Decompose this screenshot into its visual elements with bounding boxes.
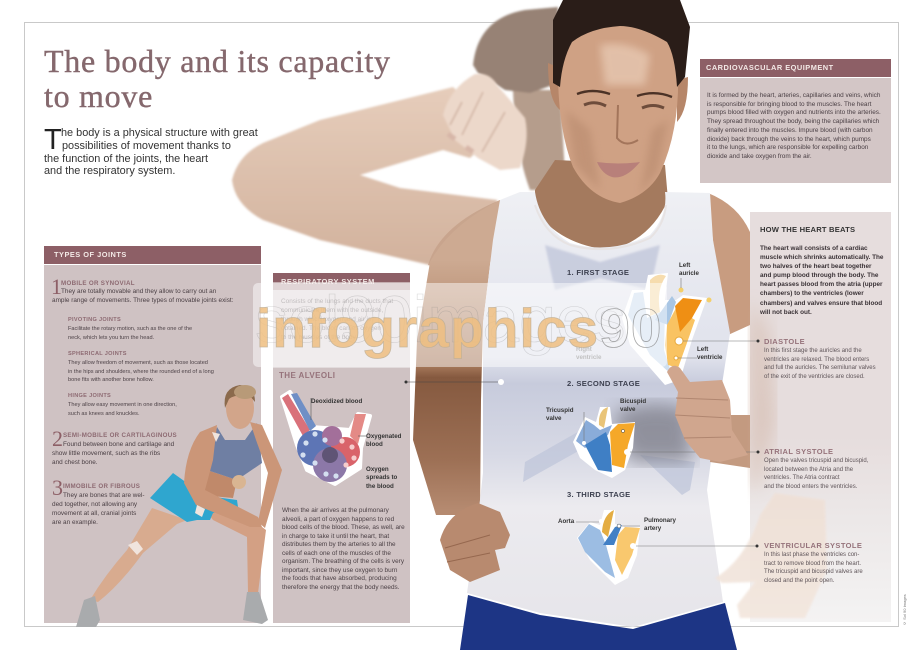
- watermark band: [253, 283, 667, 367]
- vessels: [282, 394, 310, 436]
- alveoli text: alveoli, a part of oxygen happens to red: [282, 516, 394, 522]
- types of joints text: and chest bone.: [52, 459, 98, 466]
- heart: third stage: [576, 510, 757, 585]
- man: face: [558, 18, 678, 203]
- alveoli text: cells of each one of the muscles of the: [282, 550, 391, 556]
- alveoli diagram: [280, 390, 372, 486]
- respiratory system panel: through which oxygen and air is: [281, 316, 371, 323]
- connector arrows: [404, 340, 760, 548]
- woman: midriff: [190, 470, 237, 498]
- heart: first stage: [622, 273, 757, 385]
- types of joints text: They are bones that are wel-: [63, 492, 145, 499]
- respiratory system panel: communicate them with the outside,: [281, 307, 383, 314]
- heart stage labels: Bicuspid: [620, 398, 646, 405]
- types of joints text: in the hips and shoulders, where the rounded end of a long: [68, 369, 214, 375]
- how the heart beats text: will not back out.: [760, 309, 812, 316]
- man: nose and mouth: [617, 105, 638, 144]
- heart stage labels: Aorta: [558, 518, 574, 525]
- diastole: and full the auricles. The semilunar valves: [764, 365, 876, 371]
- types of joints text: HINGE JOINTS: [68, 393, 111, 399]
- types of joints text: [51, 274, 233, 526]
- woman: head: [226, 387, 254, 429]
- man: ears: [548, 63, 688, 122]
- atrial systole: and the blood enters the ventricles.: [764, 484, 857, 490]
- intro text: [44, 124, 258, 177]
- alveoli heading: THE ALVEOLI: [279, 371, 335, 380]
- panel: alveoli background: [273, 368, 410, 623]
- types of joints text: 2: [52, 426, 63, 451]
- how the heart beats text: heart passes blood from the atria (upper: [760, 281, 883, 288]
- respiratory system panel: to the muscles of the body.: [281, 334, 357, 341]
- panel: how the heart beats background: [750, 212, 891, 622]
- heart stage labels: 2. SECOND STAGE: [567, 379, 640, 388]
- ventricular systole: In this last phase the ventricles con-: [764, 552, 859, 558]
- respiratory system panel: obtained. The blood carries oxygen: [281, 325, 381, 332]
- cardiovascular text: They spread throughout the body, being the capillaries which: [707, 118, 879, 125]
- types of joints text: They are totally movable and they allow to carry out an: [61, 288, 216, 295]
- diastole: DIASTOLE: [764, 337, 805, 346]
- types of joints text: movement at all, cranial joints: [52, 510, 136, 517]
- cardiovascular text: [707, 92, 881, 160]
- heart stage labels: valve: [620, 406, 635, 413]
- heart diagrams: [573, 273, 756, 585]
- man: left fist: [440, 503, 510, 582]
- woman: shoes: [76, 592, 268, 627]
- how the heart beats text: two halves of the heart beat together: [760, 263, 872, 270]
- woman: shorts: [150, 473, 238, 522]
- man: upper-left shoulder shadow: [428, 200, 505, 280]
- how the heart beats text: chambers) to the ventricles (lower: [760, 290, 864, 297]
- cardiovascular text: pumps blood filled with oxygen and nutrients into the arteries.: [707, 109, 881, 116]
- types of joints text: bone fits with another bone hollow.: [68, 377, 154, 383]
- woman: back leg: [90, 508, 187, 602]
- how the heart beats text: muscle which shrinks automatically. The: [760, 254, 883, 261]
- how the heart beats heading: HOW THE HEART BEATS: [760, 225, 855, 234]
- types of joints header: [44, 246, 261, 264]
- man: right fist over heart: [667, 366, 748, 462]
- alveoli text: organism. The breathing of the cells is very: [282, 558, 404, 565]
- man: left arm: [413, 200, 500, 515]
- man: tank top: [467, 192, 730, 627]
- alveoli text: [282, 507, 405, 590]
- types of joints text: neck, which lets you turn the head.: [68, 335, 154, 341]
- intro text: T: [44, 124, 62, 156]
- types of joints text: They allow easy movement in one direction,: [68, 402, 177, 408]
- types of joints text: IMMOBILE OR FIBROUS: [63, 483, 140, 490]
- alveoli text: the foods that have absorbed, producing: [282, 575, 397, 582]
- diastole: ventricles are relaxed. The blood enters: [764, 357, 869, 363]
- ventricular systole: VENTRICULAR SYSTOLE: [764, 541, 862, 550]
- photo: stretching woman: [76, 385, 282, 627]
- man: shorts: [460, 595, 737, 650]
- alveoli labels: [311, 398, 401, 490]
- panel skin tint: [750, 300, 775, 490]
- cardiovascular header: CARDIOVASCULAR EQUIPMENT: [706, 63, 834, 72]
- alveoli text: blood cells of the blood. These, as well, are: [282, 524, 405, 531]
- intro text: possibilities of movement thanks to: [62, 140, 231, 152]
- respiratory system panel: [273, 273, 410, 368]
- credit: © Sol 90 Images: [902, 594, 907, 626]
- atrial systole: ventricles. The Atria contract: [764, 475, 840, 481]
- types of joints text: Found between bone and cartilage and: [63, 441, 174, 448]
- how the heart beats text: [760, 245, 884, 316]
- man: collar trim: [535, 205, 666, 249]
- respiratory system panel: Consists of the lungs and the ducts that: [281, 298, 393, 305]
- heart stage labels: Left: [697, 346, 708, 353]
- diastole: of the exit of the ventricles are closed.: [764, 374, 865, 380]
- cardiovascular text: it to the lungs, which are responsible for expelling carbon: [707, 144, 868, 151]
- cardiovascular text: dioxide) back through the veins to the heart, which pumps: [707, 136, 871, 142]
- atrial systole: ATRIAL SYSTOLE: [764, 447, 833, 456]
- types of joints text: ded together, not allowing any: [52, 501, 137, 508]
- cardiovascular text: is responsible for bringing blood to the muscles. The heart: [707, 101, 871, 108]
- how the heart beats text: The heart wall consists of a cardiac: [760, 245, 868, 252]
- man: brows and eyes: [577, 91, 672, 97]
- diastole: In this first stage the auricles and the: [764, 348, 862, 354]
- man: shirt shadow: [612, 404, 692, 462]
- title: The body and its capacity: [44, 43, 391, 79]
- respiratory system panel: RESPIRATORY SYSTEM: [281, 277, 375, 286]
- intro text: the function of the joints, the heart: [44, 153, 208, 165]
- title: [44, 43, 391, 114]
- woman: front leg: [200, 503, 266, 593]
- types of joints text: Facilitate the rotary motion, such as the one of the: [68, 326, 192, 332]
- heart stage labels: Right: [576, 346, 592, 353]
- cardiovascular text: finally entered into the muscles. Impure blood (with carbon: [707, 127, 873, 134]
- ventricular systole: closed and the point open.: [764, 578, 834, 584]
- heart stage labels: valve: [546, 415, 561, 422]
- alveoli labels: Oxygen: [366, 466, 389, 473]
- alveoli text: in charge to take it until the heart, that: [282, 532, 389, 540]
- atrial systole: Open the valves tricuspid and bicuspid,: [764, 458, 868, 464]
- types of joints text: SEMI-MOBILE OR CARTILAGINOUS: [63, 432, 177, 439]
- cardiovascular text: It is formed by the heart, arteries, capillaries and veins, which: [707, 92, 880, 99]
- alveoli text: important, since they use oxygen to burn: [282, 566, 397, 574]
- heart stage labels: ventricle: [576, 354, 601, 361]
- heart: second stage: [573, 407, 757, 478]
- alveoli labels: the blood: [366, 483, 394, 490]
- cardiovascular header: [700, 59, 891, 77]
- types of joints text: are an example.: [52, 519, 98, 526]
- ghost hand: [715, 493, 827, 618]
- types of joints text: 3: [52, 475, 63, 500]
- panel: cardiovascular background: [700, 78, 891, 183]
- how the heart beats text: and pump blood through the body. The: [760, 272, 878, 279]
- types of joints text: ample range of movements. Three types of movable joints exist:: [52, 297, 233, 304]
- heart stage labels: ventricle: [697, 354, 722, 361]
- alveoli labels: Deoxidized blood: [311, 398, 362, 405]
- heart stage labels: [546, 262, 722, 532]
- heart stage labels: auricle: [679, 270, 699, 277]
- intro text: and the respiratory system.: [44, 165, 175, 177]
- man: right forearm: [710, 415, 750, 468]
- types of joints text: They allow freedom of movement, such as those located: [68, 360, 208, 366]
- diastole: [764, 337, 876, 380]
- ventricular systole: [764, 541, 863, 584]
- heart stage labels: 3. THIRD STAGE: [567, 490, 631, 499]
- woman: arms: [184, 422, 282, 528]
- man: hair: [553, 0, 690, 87]
- alveoli text: therefore the energy that the body needs.: [282, 584, 400, 590]
- types of joints text: PIVOTING JOINTS: [68, 317, 121, 323]
- man: neck and shoulders: [535, 160, 668, 250]
- types of joints text: MOBILE OR SYNOVIAL: [61, 280, 135, 287]
- types of joints text: such as knees and knuckles.: [68, 411, 140, 417]
- ventricular systole: The tricuspid and bicuspid valves are: [764, 569, 863, 575]
- alveoli labels: Oxygenated: [366, 433, 401, 440]
- alveoli labels: blood: [366, 441, 383, 448]
- heart stage labels: Left: [679, 262, 690, 269]
- heart stage labels: Pulmonary: [644, 517, 676, 524]
- woman: sports bra: [207, 423, 262, 480]
- atrial systole: located between the Atria and the: [764, 467, 853, 473]
- panel: types of joints background: [44, 265, 261, 623]
- ghost head: [473, 7, 566, 190]
- alveolar cluster: [297, 430, 333, 466]
- alveoli text: When the air arrives at the pulmonary: [282, 507, 389, 514]
- ghost raised arm: [232, 74, 527, 265]
- heart stage labels: 1. FIRST STAGE: [567, 268, 629, 277]
- atrial systole: [764, 447, 868, 490]
- heart stage labels: artery: [644, 525, 661, 532]
- watermark text: infographics90: [256, 297, 663, 359]
- white halo: [282, 392, 370, 484]
- alveoli text: distributes them by the arteries to all the: [282, 541, 396, 548]
- heart stage labels: Tricuspid: [546, 407, 574, 414]
- man: lungs on shirt: [523, 245, 695, 495]
- title: to move: [44, 78, 153, 114]
- types of joints text: SPHERICAL JOINTS: [68, 351, 127, 357]
- types of joints text: show little movement, such as the ribs: [52, 450, 160, 457]
- man: facial shading: [566, 110, 668, 195]
- alveoli labels: spreads to: [366, 474, 397, 481]
- ventricular systole: tract to remove blood from the heart.: [764, 561, 861, 567]
- man: right upper arm: [708, 193, 750, 335]
- types of joints text: 1: [51, 274, 62, 299]
- types of joints header: TYPES OF JOINTS: [54, 250, 127, 259]
- cardiovascular text: dioxide and take oxygen from the air.: [707, 153, 812, 160]
- how the heart beats text: chambers) and valves ensure that blood: [760, 300, 882, 307]
- intro text: he body is a physical structure with great: [61, 127, 258, 139]
- woman: patch marks: [232, 475, 246, 489]
